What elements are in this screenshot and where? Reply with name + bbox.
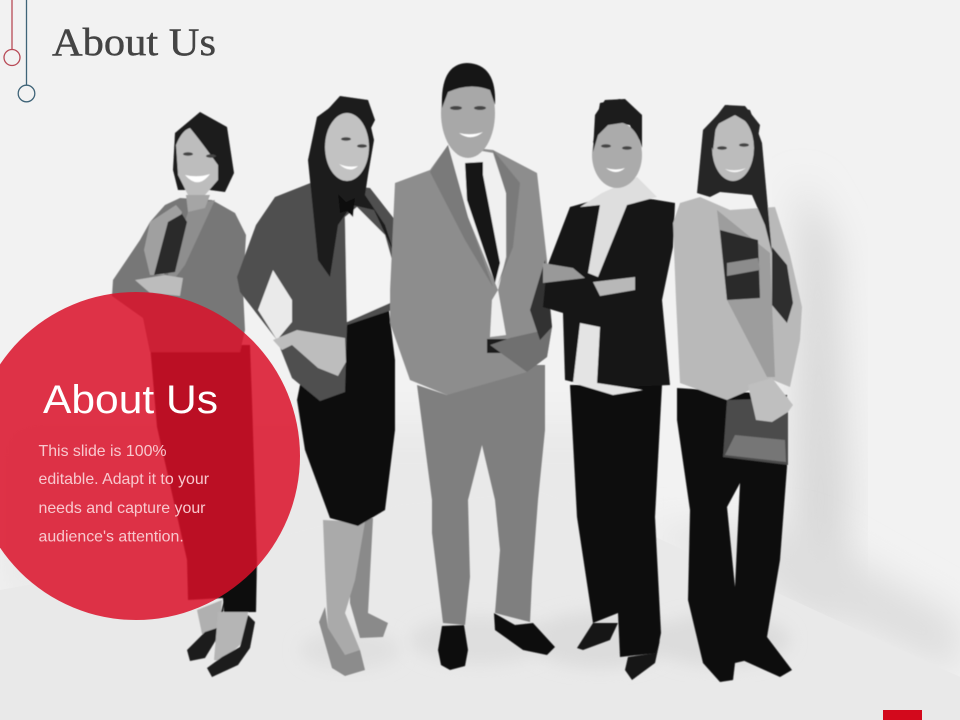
person 2 [237, 96, 395, 676]
decoration: blue hanging circle [18, 0, 35, 102]
circle body text: audience's attention. [38, 528, 184, 546]
person 1 [112, 112, 257, 677]
person 3 [390, 63, 555, 670]
title: About Us [52, 21, 216, 64]
circle body text: This slide is 100% [38, 443, 167, 460]
panel: red about circle [0, 292, 300, 620]
person 4 [543, 99, 675, 680]
circle body text: needs and capture your [38, 500, 206, 517]
decoration: red hanging circle [4, 0, 20, 66]
circle heading: About Us [43, 378, 218, 422]
photo: group of five people [112, 63, 802, 682]
person 5 [673, 105, 802, 682]
circle body text: editable. Adapt it to your [38, 471, 210, 488]
red corner tab [883, 710, 922, 720]
